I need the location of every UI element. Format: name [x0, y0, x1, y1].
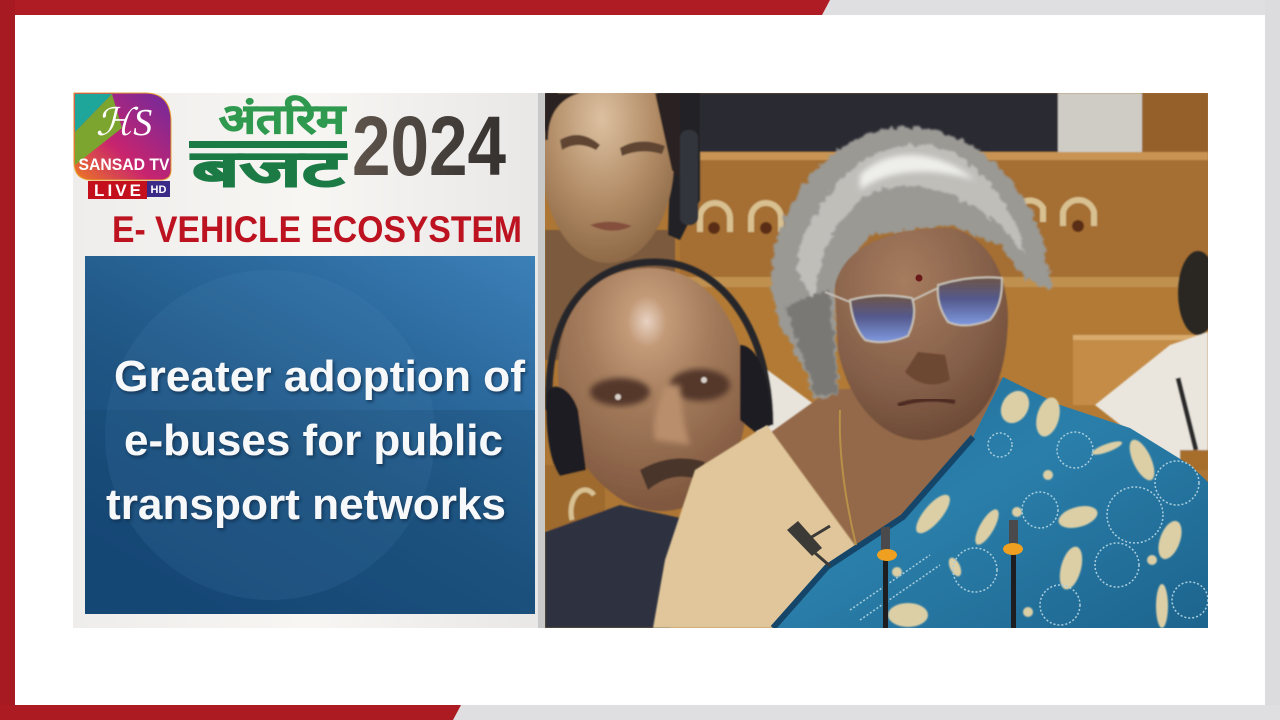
- person: background woman: [545, 93, 701, 360]
- title: interim budget 2024: [189, 95, 506, 197]
- neck and chest: [771, 378, 1002, 545]
- necklace: [840, 410, 856, 545]
- blouse: [653, 425, 860, 628]
- logo: Sansad TV: HD: [151, 184, 166, 196]
- title: interim budget 2024: बजट: [190, 141, 347, 197]
- logo: Sansad TV: ℋS: [96, 102, 152, 144]
- heading: e-vehicle ecosystem: E- VEHICLE ECOSYSTEM: [112, 209, 522, 250]
- person: right figure: [1095, 251, 1218, 470]
- title: interim budget 2024: अंतरिम: [219, 95, 347, 142]
- logo: Sansad TV: [74, 93, 171, 200]
- desk microphones: [877, 520, 1023, 628]
- glasses: [825, 277, 1002, 342]
- logo: Sansad TV: LIVE: [94, 181, 141, 200]
- panel: blue message: [85, 256, 535, 614]
- background bench: [545, 93, 1208, 437]
- hair: [772, 127, 1052, 400]
- panel: left budget graphic: [73, 93, 545, 628]
- logo: Sansad TV: SANSAD TV: [78, 155, 170, 174]
- message text: Greater adoption of: [114, 352, 525, 401]
- person: background man with headphones: [545, 262, 815, 628]
- message text: transport networks: [106, 480, 506, 529]
- person: finance minister: [653, 127, 1208, 628]
- lapel microphone: [787, 521, 830, 566]
- title: interim budget 2024: 2024: [352, 99, 506, 193]
- saree: [773, 377, 1208, 628]
- saree pattern: [850, 386, 1208, 628]
- message text: [106, 352, 525, 529]
- message text: e-buses for public: [124, 416, 503, 465]
- photo: finance minister speaking in parliament: [542, 57, 1218, 628]
- face: [835, 228, 1008, 440]
